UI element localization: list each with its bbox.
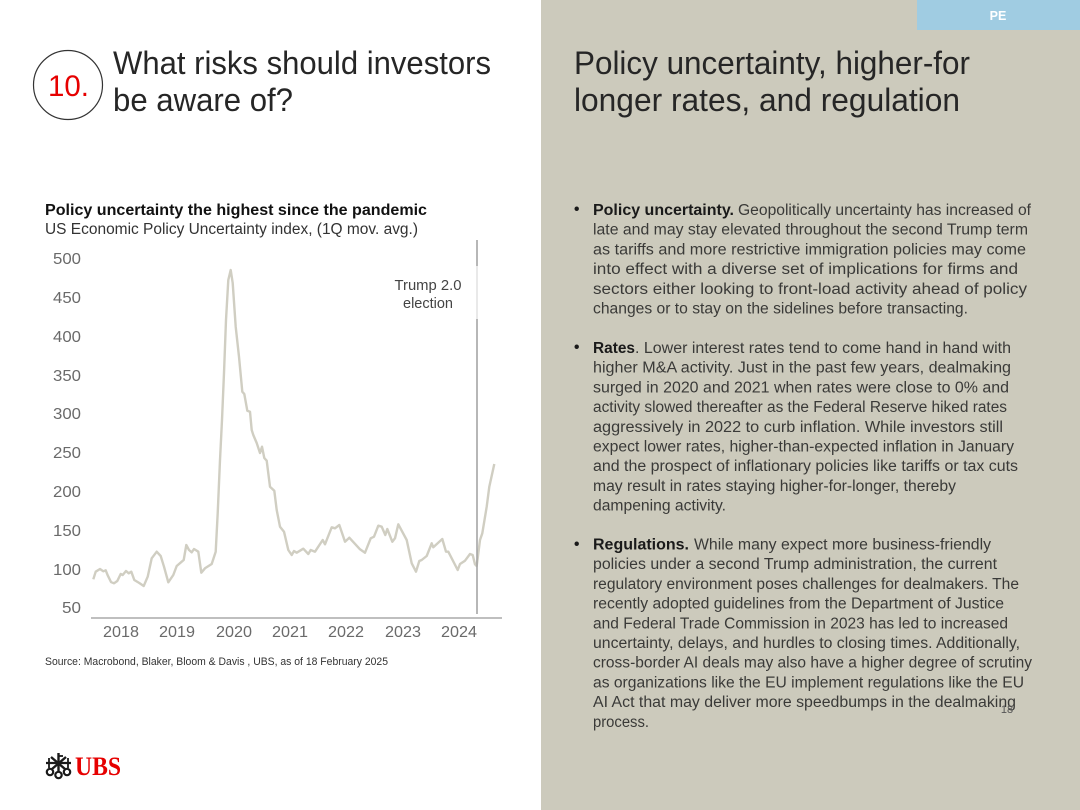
title: left heading: be aware of? — [113, 82, 293, 118]
y axis labels: 250 — [53, 445, 81, 462]
x axis: 2019 — [159, 624, 195, 641]
text block: regulations: AI Act that may deliver more speedbumps in the dealmaking — [593, 694, 1016, 711]
text block: rates: surged in 2020 and 2021 when rates were close to 0% and — [593, 379, 1009, 396]
icon: section number 10 — [34, 50, 102, 120]
text block: rates — [574, 339, 1018, 515]
text block: policy uncertainty: late and may stay elevated throughout the second Trump term — [593, 222, 1028, 239]
y axis labels: 300 — [53, 406, 81, 423]
text block: regulations: policies under a second Trump administration, the current — [593, 556, 998, 573]
text block: policy uncertainty: into effect with a diverse set of implications for firms and — [593, 261, 1018, 278]
chart heading — [45, 202, 427, 238]
text block: regulations: While many expect more business-friendly — [694, 536, 991, 554]
text block: rates: Rates — [593, 340, 635, 357]
y axis labels: 200 — [53, 484, 81, 501]
text block: regulations: uncertainty, delays, and hurdles to closing times. Additionally, — [593, 635, 1020, 652]
text block: rates: dampening activity. — [593, 498, 726, 515]
text block: rates: activity slowed thereafter as the Federal Reserve hiked rates — [593, 399, 1007, 416]
text block: regulations: Regulations. — [593, 536, 689, 554]
text block: rates: and the prospect of inflationary policies like tariffs or tax cuts — [593, 458, 1018, 475]
title: left heading — [113, 45, 491, 118]
text block: policy uncertainty: as tariffs and more restrictive immigration policies may come — [593, 241, 1026, 258]
x axis: 2022 — [328, 624, 364, 641]
y axis labels: 350 — [53, 368, 81, 385]
x axis: 2023 — [385, 624, 421, 641]
x axis: 2021 — [272, 624, 308, 641]
text block: rates: . Lower interest rates tend to come hand in hand with — [635, 340, 1011, 357]
y axis labels: 450 — [53, 290, 81, 307]
title: right heading — [574, 45, 970, 118]
election marker line — [476, 240, 478, 614]
text block: policy uncertainty: Geopolitically uncertainty has increased of — [738, 202, 1032, 219]
annotation: Trump 2.0 election: Trump 2.0 — [394, 278, 462, 294]
logo: UBS — [46, 752, 121, 781]
y axis labels: 50 — [62, 600, 81, 617]
text block: rates: • — [574, 339, 579, 356]
panel: right background — [541, 0, 1080, 810]
icon: three keys — [46, 753, 71, 778]
x axis: 2024 — [441, 624, 477, 641]
x axis: 2018 — [103, 624, 139, 641]
y axis labels: 150 — [53, 523, 81, 540]
chart heading: US Economic Policy Uncertainty index, (1Q mov. avg.) — [45, 221, 418, 238]
title: left heading: What risks should investors — [113, 45, 491, 81]
title: right heading: Policy uncertainty, higher-for — [574, 45, 970, 81]
text block: regulations: • — [574, 536, 579, 553]
text block: rates: higher M&A activity. Just in the past few years, dealmaking — [593, 360, 1011, 377]
text block: policy uncertainty: sectors either looking to front-load activity ahead of policy — [593, 281, 1027, 298]
title: right heading: longer rates, and regulation — [574, 82, 960, 118]
text block: policy uncertainty — [574, 201, 1032, 318]
y axis labels: 500 — [53, 251, 81, 268]
logo: UBS: UBS — [75, 752, 121, 781]
tag: PE: PE — [990, 9, 1006, 23]
text block: rates: aggressively in 2022 to curb inflation. While investors still — [593, 419, 1003, 436]
text block: regulations: process. — [593, 714, 649, 731]
tag: PE — [917, 0, 1080, 30]
text block: policy uncertainty: • — [574, 201, 579, 218]
page number: 18 — [1001, 704, 1013, 716]
text block: regulations: regulatory environment poses challenges for dealmakers. The — [593, 576, 1019, 593]
text block: regulations: recently adopted guidelines from the Department of Justice — [593, 596, 1004, 613]
x axis: 2020 — [216, 624, 252, 641]
text block: rates: may result in rates staying higher-for-longer, thereby — [593, 478, 956, 495]
text block: regulations: and Federal Trade Commission in 2023 has led to increased — [593, 615, 1008, 632]
x axis — [91, 618, 502, 641]
icon: section number 10: 10. — [48, 70, 89, 103]
y axis labels: 400 — [53, 329, 81, 346]
text block: regulations: as organizations like the EU implement regulations like the EU — [593, 674, 1024, 691]
source note: Source: Macrobond, Blaker, Bloom & Davis , UBS, as of 18 February 2025 — [45, 656, 388, 668]
annotation: Trump 2.0 election: election — [403, 296, 453, 312]
text block: regulations: cross-border AI deals may also have a higher degree of scrutiny — [593, 655, 1032, 672]
text block: rates: expect lower rates, higher-than-expected inflation in January — [593, 438, 1014, 456]
chart heading: Policy uncertainty the highest since the pandemic — [45, 202, 427, 219]
text block: regulations — [574, 536, 1032, 731]
y axis labels: 100 — [53, 562, 81, 579]
annotation: Trump 2.0 election — [394, 278, 462, 312]
y axis labels — [53, 251, 81, 617]
text block: policy uncertainty: changes or to stay on the sidelines before transacting. — [593, 300, 968, 318]
line chart: policy uncertainty index — [53, 240, 502, 641]
text block: policy uncertainty: Policy uncertainty. — [593, 202, 734, 219]
data line — [93, 270, 494, 586]
